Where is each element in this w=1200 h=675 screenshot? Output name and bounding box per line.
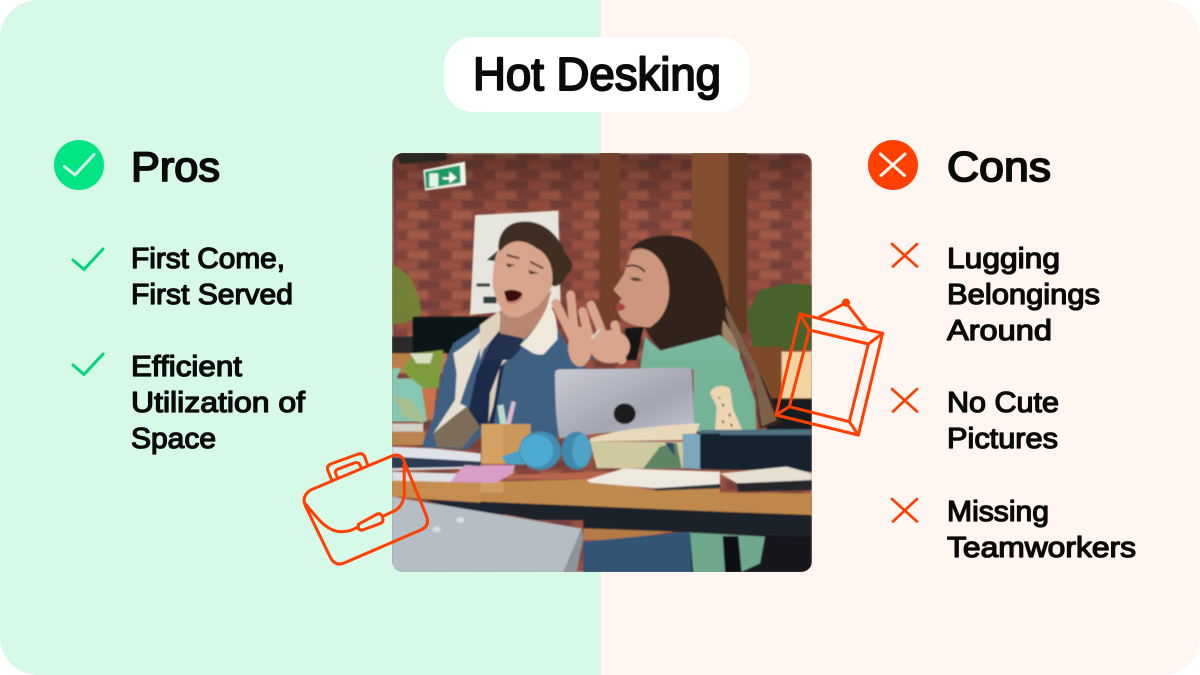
woman: long hair: [724, 296, 784, 429]
photo: two coworkers at a desk: [392, 153, 812, 572]
pro item: first come first served: First Come,: [131, 243, 285, 275]
title: Hot Desking: [473, 48, 721, 100]
heads and hands, coordinates follow a 3x grid: [480, 222, 741, 367]
title: [444, 37, 750, 112]
right background and woman's body, coordinates follow a 3x grid: [583, 153, 812, 572]
pro item: efficient utilization of space: [73, 351, 306, 455]
cheetah figurine: [710, 386, 743, 431]
woman: shirt: [640, 337, 757, 432]
pro item: first come first served: [73, 243, 293, 311]
pro item: efficient utilization of space: Utilization of: [131, 387, 306, 419]
icon: framed picture outline: [776, 300, 883, 435]
heading: cons: Cons: [947, 143, 1051, 190]
con item: missing teamworkers: Missing: [947, 496, 1049, 528]
pro item: first come first served: First Served: [131, 279, 293, 311]
pro item: efficient utilization of space: Efficient: [131, 351, 242, 383]
icon: cons cross badge: [868, 140, 918, 190]
con item: lugging belongings around: [892, 243, 1100, 347]
panel: pros: [54, 140, 306, 455]
man: face: [493, 240, 553, 317]
woman: hair and face: [630, 236, 741, 360]
panel: cons: [868, 140, 1136, 564]
con item: missing teamworkers: Teamworkers: [947, 532, 1136, 564]
con item: missing teamworkers: [892, 496, 1136, 564]
pro item: efficient utilization of space: Space: [131, 423, 216, 455]
con item: no cute pictures: [892, 387, 1059, 455]
box, legs and far desk: [696, 432, 812, 472]
left background and man's body, coordinates follow a 3x grid: [392, 153, 592, 450]
heading: pros: Pros: [131, 143, 220, 190]
icon: pros check badge: [54, 140, 104, 190]
con item: lugging belongings around: Around: [947, 315, 1052, 347]
con item: no cute pictures: Pictures: [947, 423, 1058, 455]
laptop, headphones and desk items, coordinates follow a 3x grid: [480, 368, 720, 520]
hands: [556, 295, 622, 360]
con item: no cute pictures: No Cute: [947, 387, 1059, 419]
man: jacket: [421, 326, 588, 451]
con item: lugging belongings around: Lugging: [947, 243, 1060, 275]
left desk and foreground, coordinates follow a 3x grid: [392, 447, 583, 572]
icon: briefcase outline: [304, 454, 428, 564]
con item: lugging belongings around: Belongings: [947, 279, 1100, 311]
man: neck and collar: [500, 290, 552, 340]
